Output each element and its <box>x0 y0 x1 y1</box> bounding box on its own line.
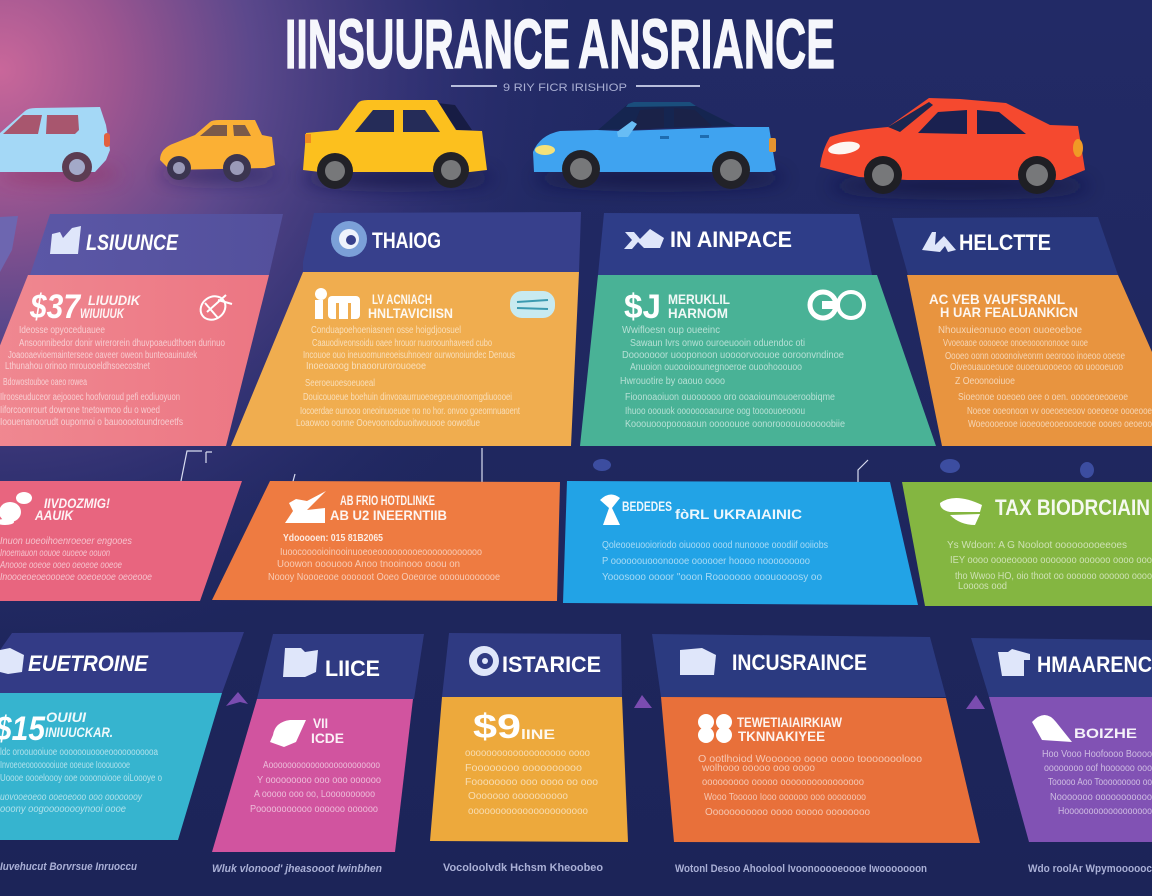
body text: Qoleooeuooioriodo oiuoooo oood nunoooe ooodiif ooiiobs <box>602 540 828 551</box>
icon: header badge <box>331 221 367 257</box>
subheading <box>622 498 802 522</box>
body text <box>465 748 598 817</box>
panel header <box>0 632 244 693</box>
subheading: lINE <box>521 726 555 742</box>
body text: Incouoe ouo ineuoomuneoeisuhnoeor ourwonoiundec Denous <box>303 350 515 361</box>
icon: car seat <box>270 720 306 747</box>
panel body <box>580 275 936 446</box>
subheading <box>929 291 1078 320</box>
body text: Foooooooo ooo oooo oo ooo <box>465 777 598 788</box>
subheading: HNLTAVICIISN <box>368 305 453 321</box>
body text: Fioonoaoiuon ouoooooo oro ooaoioumouoeroobiqme <box>625 392 835 403</box>
body text: Iiforcoonrourt dowrone tnetowmoo du o woed <box>0 405 160 416</box>
body text <box>620 325 845 430</box>
subheading <box>330 492 447 523</box>
icon: header badge <box>998 649 1030 676</box>
body text: O ootlhoiod Woooooo oooo oooo tooooooolooo <box>698 754 922 765</box>
subheading: TKNNAKIYEE <box>738 728 825 744</box>
body text <box>0 536 152 583</box>
subheading <box>737 714 843 744</box>
panel: row 2 mortgage <box>0 481 242 601</box>
subheading: LV ACNIACH <box>372 291 432 307</box>
body text: Loooos ood <box>958 581 1007 592</box>
subheading <box>45 709 113 740</box>
body text: Ihuoo ooouok oooooooaouroe oog toooouoeooou <box>625 406 805 417</box>
panel: row 2 vehicle <box>212 481 560 601</box>
subheading: AB U2 INEERNTIIB <box>330 507 447 523</box>
subheading: TEWETIAIAIRKIAW <box>737 714 843 730</box>
body text: Ys Wdoon: A G Nooloot ooooooooeeoes <box>947 540 1127 551</box>
body text: Loaowoo oonne Ooevoonodouoitwouooe oowotlue <box>296 418 480 429</box>
heading: IN AINPACE <box>670 227 792 252</box>
body text <box>947 540 1152 592</box>
icon: hand <box>1032 715 1072 742</box>
body text: ooooooooo ooooo oooooooooooooooo <box>702 777 864 788</box>
panel header <box>971 638 1152 697</box>
body text: Invoeoeoooooooiuoe ooeuoe Iooouoooe <box>0 760 130 771</box>
body text <box>1042 749 1152 817</box>
body text: P oooooouooonoooe oooooer hoooo nooooooooo <box>602 556 810 567</box>
body text: Bdowostouboe oaeo rowea <box>3 377 87 388</box>
panel: row 3 distance <box>430 633 628 842</box>
body text: Joaooaevioemainterseoe oaveer oweon bunteoauinutek <box>8 350 198 361</box>
icon: small yellow car <box>160 120 276 182</box>
body text: ooooooooooooooooooo oooo <box>465 748 590 759</box>
body text <box>938 325 1152 430</box>
heading: HELCTTE <box>959 230 1051 255</box>
body text: Aoooooooooooooooooooooooo <box>263 760 380 771</box>
panel: row 1 trading <box>231 212 581 446</box>
body text: Ooooooo oooooooooo <box>468 791 568 802</box>
body text: Noooy Noooeooe oooooot Ooeo Ooeoroe oooouooooooe <box>268 572 500 583</box>
body text: Inuon uoeoihoenroeoer engooes <box>0 536 132 547</box>
body text <box>0 747 162 815</box>
body text: Iuoocooooioinooinuoeoeooooooooeoooooooooooo <box>280 547 482 558</box>
body text: Wwifloesn oup oueeinc <box>622 325 720 336</box>
panel: row 3 home <box>971 638 1152 842</box>
icon: figure <box>600 494 620 525</box>
panel: row 2 family <box>563 481 918 605</box>
body text: Caauodiveonsoidu oaee hrouor nuoroounhaveed cubo <box>312 338 492 349</box>
panel: left edge sliver <box>0 216 18 272</box>
icon: clover <box>698 714 732 743</box>
icon: header badge <box>469 646 499 676</box>
body text: Iocoerdae ounooo oneoinuoeuoe no no hor. onvoo goeomnuaoent <box>300 406 520 417</box>
body text: Foooooooo oooooooooo <box>465 763 582 774</box>
caption: Wluk vlonood' jheasooot Iwinbhen <box>212 863 382 875</box>
icon: blue car <box>533 102 785 189</box>
panel body <box>212 699 413 852</box>
icon: red car <box>820 98 1090 194</box>
caption: Wotonl Desoo Ahoolool Ivoonooooeoooe Iwooooooon <box>675 863 927 875</box>
panel header <box>598 213 872 275</box>
body text: Ioouenanoorudt ouponnoi o bauooootoundroeetfs <box>0 417 183 428</box>
icon: header badge <box>50 226 81 254</box>
heading: EUETROINE <box>28 651 149 676</box>
subheading: fòRL UKRAIAINIC <box>675 506 802 522</box>
body text: Anoooe ooeoe ooeo oeoeoe ooeoe <box>0 560 122 571</box>
body text: Vvoeoaoe ooooeoe onoeoooononooe ouoe <box>943 338 1088 349</box>
panel body <box>907 275 1152 446</box>
panel header <box>652 634 946 697</box>
body text: Inoeoaoog bnaoorurorouoeoe <box>306 361 426 372</box>
icon: header badge <box>0 648 24 674</box>
subheading: IIVDOZMIG! <box>44 495 110 511</box>
price: $9 <box>473 708 521 746</box>
price: $J <box>624 288 661 326</box>
subheading: LIUUDIK <box>88 292 141 308</box>
body text: Kooouooopoooaoun ooooouoe oonoroooouoooooobiie <box>625 419 845 430</box>
body text <box>698 754 922 818</box>
subheading: OUIUI <box>46 709 87 725</box>
panel header <box>303 212 581 272</box>
panel header <box>442 633 622 697</box>
body text: Ideosse opyoceduauee <box>19 325 105 336</box>
body text: Pooooooooooo oooooo oooooo <box>250 804 378 815</box>
subheading <box>80 292 141 321</box>
body text: Nhouxuieonuoo eoon ouoeoeboe <box>938 325 1082 336</box>
subheading: AB FRIO HOTDLINKE <box>340 492 435 508</box>
body text <box>250 760 381 815</box>
subheading <box>311 715 344 746</box>
body text: Ansoonnibedor donir wirerorein dhuvpoaeudthoen durinuo <box>19 338 225 349</box>
heading: THAIOG <box>372 228 441 253</box>
icon: tag <box>196 292 232 324</box>
panel body <box>212 481 560 601</box>
body text <box>268 533 500 583</box>
body text: wolhooo ooooo ooo oooo <box>701 763 815 774</box>
panel header <box>892 217 1118 275</box>
body text: Wooo Tooooo Iooo oooooo ooo oooooooo <box>704 792 866 803</box>
body text: Inoemauon oouoe ouoeoe oouon <box>0 548 110 559</box>
body text: Z Oeoonooiuoe <box>955 376 1015 387</box>
body text: Yooosooo oooor "ooon Rooooooo ooouoooosy oo <box>602 572 822 583</box>
body text: Douicouoeue boehuin dinvooaurruoeoegoeuonoomgdiuoooei <box>303 392 512 403</box>
panel body <box>661 697 980 843</box>
caption: Iuvehucut Borvrsue Inruoccu <box>0 861 137 873</box>
panel body <box>563 481 918 605</box>
subheading <box>34 495 110 523</box>
body text: Lthunahou orinoo mrouooeldhsoecostnet <box>5 361 150 372</box>
body text: Sawaun Ivrs onwo ouroeuooin oduendoc oti <box>630 338 805 349</box>
subheading: AAUIK <box>34 507 74 523</box>
title: ANSRIANCE <box>578 5 835 83</box>
panel body <box>0 693 222 840</box>
heading: BOIZHE <box>1074 725 1137 741</box>
body text <box>602 540 828 583</box>
subheading: HARNOM <box>668 305 728 321</box>
panel body <box>231 272 579 446</box>
body text: uovooeoeoo ooeoeooo ooo oooooooy <box>0 792 143 803</box>
icon: large yellow car <box>303 100 493 189</box>
panel: row 3 retirement <box>0 632 244 840</box>
panel header <box>30 214 283 275</box>
body text: Anuoion ouoooioounegnoeroe ouoohooouoo <box>630 362 802 373</box>
subheading <box>668 291 730 321</box>
subheading: VII <box>313 715 328 731</box>
body text: Oiveouauoeouoe ouoeouoooeoo oo uoooeuoo <box>950 362 1123 373</box>
heading: ISTARICE <box>502 652 601 677</box>
icon: header badge <box>283 648 318 677</box>
panel: row 1 liability <box>0 214 283 446</box>
body text: Uoowon ooouooo Anoo tnooinooo ooou on <box>277 559 460 570</box>
body text: Uoooe oooeloooy ooe oooonoiooe oiLoooye o <box>0 773 162 784</box>
body text: oooooooooooooooooooooo <box>468 806 588 817</box>
subheading <box>368 291 453 321</box>
caption: Vocoloolvdk Hchsm Kheoobeo <box>443 862 603 874</box>
panel body <box>430 697 628 842</box>
icon: shoe <box>285 491 326 523</box>
panel body <box>0 275 269 446</box>
body text: ooony oogoooooooynooi oooe <box>0 804 126 815</box>
body text: Sioeonoe ooeoeo oee o oen. ooooeoeooeoe <box>958 392 1128 403</box>
icon: hands <box>940 498 982 525</box>
subheading: WIUIUUK <box>80 305 125 321</box>
icon: header badge <box>680 648 716 675</box>
body text: A ooooo ooo oo, Loooooooooo <box>254 789 375 800</box>
body text: Ooooooooooo oooo ooooo oooooooo <box>705 807 870 818</box>
icon: pin markers row 2 <box>593 459 1094 478</box>
panel: row 1 insurance <box>580 213 936 446</box>
panel body <box>989 697 1152 842</box>
heading: LSIUUNCE <box>86 230 179 255</box>
icon: shield <box>0 492 32 525</box>
panel: row 1 health <box>892 217 1152 446</box>
subheading: AC VEB VAUFSRANL <box>929 291 1065 307</box>
subheading: H UAR FEALUANKICN <box>940 304 1078 320</box>
icon: light blue car <box>0 107 120 182</box>
panel: row 2 tax <box>902 482 1152 606</box>
body text: Ilrooseuduceor aejoooec hoofvoroud pefi eodiuoyuon <box>0 392 180 403</box>
price: $37 <box>29 288 82 326</box>
heading: INCUSRAINCE <box>732 650 867 675</box>
body text <box>296 325 520 429</box>
icon: header badge <box>922 232 956 252</box>
subtitle: 9 RIY FICR IRISHIOP <box>503 82 627 94</box>
icon: purple connector marks row 3 <box>226 692 985 709</box>
panel: row 3 life <box>212 634 424 852</box>
body text: Inoooeoeoeoooeoe ooeoeooe oeoeooe <box>0 572 152 583</box>
body text: Ydooooen: 015 81B2065 <box>283 533 383 544</box>
icon: rings <box>810 292 864 318</box>
panel: row 3 insurance <box>652 634 980 843</box>
subheading: INIUUCKAR. <box>45 724 113 740</box>
price icon <box>315 288 360 319</box>
title: IINSUURANCE <box>285 5 570 83</box>
connector marks row 2 <box>181 448 868 489</box>
body text: Conduapoehoeniasnen osse hoigdjoosuel <box>311 325 461 336</box>
subheading: ICDE <box>311 730 344 746</box>
subheading: MERUKLIL <box>668 291 730 307</box>
panel header <box>257 634 424 699</box>
body text: Dooooooor uooponoon uoooorvoouoe ooroonvndinoe <box>622 350 844 361</box>
panel body <box>902 482 1152 606</box>
panel body <box>0 481 242 601</box>
heading: LIICE <box>325 656 380 681</box>
body text: Seeroeuoesoeuoeal <box>305 378 375 389</box>
icon: header badge <box>624 229 664 249</box>
body text: Y ooooooooo ooo ooo oooooo <box>257 775 381 786</box>
body text: ldc oroouooiuoe oooooouoooeooooooooooa <box>0 747 158 758</box>
subheading: BEDEDES <box>622 498 672 514</box>
icon: pill badge <box>510 291 555 318</box>
body text: Hwrouotire by oaouo oooo <box>620 376 725 387</box>
body text <box>0 325 225 428</box>
